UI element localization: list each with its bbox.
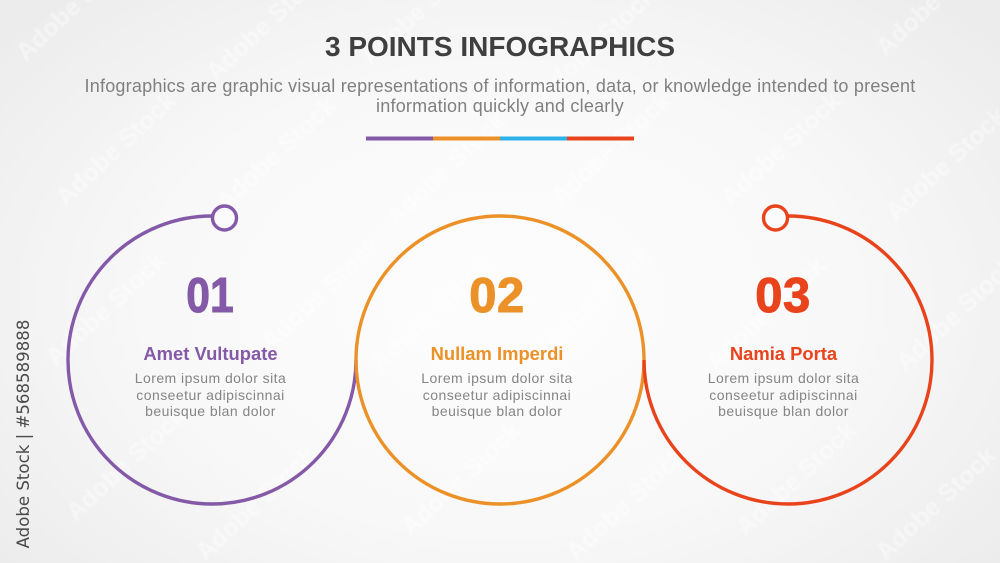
circle 3 marker (764, 206, 788, 230)
circle 3 arc (644, 216, 932, 504)
circle 2 ring (356, 216, 644, 504)
title: 3 POINTS INFOGRAPHICS (325, 31, 675, 62)
background watermarks: Adobe Stock (381, 107, 511, 231)
subtitle text (85, 76, 916, 116)
background watermarks: Adobe Stock (191, 442, 321, 563)
body text 3 (708, 370, 859, 419)
background watermarks: Adobe Stock (366, 252, 496, 376)
number 01: 01 (186, 269, 234, 323)
body text 2: conseetur adipiscinnai (423, 386, 571, 402)
subtitle text: Infographics are graphic visual representations of information, data, or knowledge intended to present (85, 76, 915, 96)
background watermarks: Adobe Stock (546, 87, 676, 211)
circle 1 arc (68, 216, 356, 504)
background watermarks: Adobe Stock (561, 442, 691, 563)
circle 1 marker (212, 206, 236, 230)
background watermarks: Adobe Stock (731, 417, 861, 541)
heading 1: Amet Vultupate (143, 343, 278, 364)
colored divider (366, 136, 634, 140)
body text 1: Lorem ipsum dolor sita (135, 370, 286, 386)
body text 1: beuisque blan dolor (145, 403, 276, 419)
background watermarks: Adobe Stock (61, 402, 191, 526)
subtitle text: information quickly and clearly (376, 96, 624, 116)
stock id label: Adobe Stock | #568589888 (14, 320, 33, 548)
heading 2: Nullam Imperdi (431, 343, 563, 364)
background watermarks: Adobe Stock (716, 87, 846, 211)
background watermarks: Adobe Stock (51, 87, 181, 211)
background watermarks: Adobe Stock (211, 92, 341, 216)
background watermarks: Adobe Stock (396, 417, 526, 541)
body text 2: Lorem ipsum dolor sita (421, 370, 573, 386)
background watermarks: Adobe Stock (526, 242, 656, 366)
background watermarks: Adobe Stock (256, 232, 386, 356)
body text 2: beuisque blan dolor (432, 403, 562, 419)
body text 2 (421, 370, 573, 419)
background watermarks: Adobe Stock (701, 252, 831, 376)
body text 1 (135, 370, 286, 419)
body text 3: beuisque blan dolor (718, 403, 849, 419)
number 02: 02 (469, 269, 525, 323)
number 03: 03 (755, 269, 811, 323)
body text 1: conseetur adipiscinnai (136, 386, 285, 402)
heading 3: Namia Porta (730, 343, 837, 364)
body text 3: conseetur adipiscinnai (709, 386, 858, 402)
background watermarks: Adobe Stock (41, 247, 171, 371)
body text 3: Lorem ipsum dolor sita (708, 370, 859, 386)
